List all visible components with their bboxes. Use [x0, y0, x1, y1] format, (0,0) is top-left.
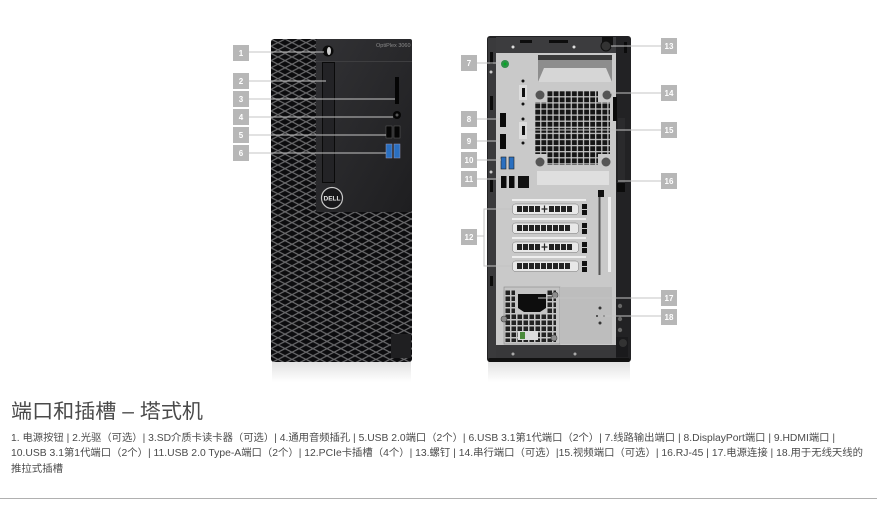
label 15: 15	[665, 126, 674, 135]
label 5: 5	[239, 131, 244, 140]
description text: 推拉式插槽	[11, 462, 63, 475]
optical drive bay	[322, 62, 334, 182]
label 5	[233, 127, 249, 143]
RJ-45 port	[518, 176, 529, 188]
label 2: 2	[239, 77, 244, 86]
top trapezoid vent	[538, 55, 612, 82]
PCIe side rail	[598, 197, 611, 275]
label 8	[461, 111, 477, 127]
label 16	[661, 173, 677, 189]
label 9: 9	[467, 137, 472, 146]
description text: 1. 电源按钮 | 2.光驱（可选）| 3.SD介质卡读卡器（可选）| 4.通用音频插孔 | 5.USB 2.0端口（2个）| 6.USB 3.1第1代端口（2个）| 7.线路输出端口 | 8.DisplayPort端口 | 9.HDMI端口 |	[11, 431, 835, 444]
USB 3.1 rear ports	[501, 157, 514, 169]
label 4	[233, 109, 249, 125]
reflection under front tower	[272, 362, 411, 382]
label 7	[461, 55, 477, 71]
label 11	[461, 171, 477, 187]
PCIe slot 4	[512, 256, 587, 272]
power switch	[518, 331, 538, 340]
PCIe slot 3	[512, 237, 587, 253]
label 1: 1	[239, 49, 244, 58]
USB 3.1 front ports	[386, 144, 400, 158]
USB 2.0 front ports	[386, 126, 400, 138]
label 7: 7	[467, 59, 472, 68]
label 9	[461, 133, 477, 149]
bottom divider	[0, 498, 877, 499]
thumbscrew	[601, 37, 613, 51]
left edge grey strip	[488, 38, 496, 360]
lower right foot	[616, 337, 628, 357]
panel: rear view of tower	[487, 36, 631, 382]
description text	[11, 431, 863, 475]
rear tower body	[487, 36, 631, 362]
silver rear plate	[496, 53, 616, 345]
label 3	[233, 91, 249, 107]
AC power socket	[515, 288, 547, 314]
label 10: 10	[465, 156, 474, 165]
HDMI port	[500, 134, 506, 149]
label 16: 16	[665, 177, 674, 186]
label 8: 8	[467, 115, 472, 124]
PCIe slot 2	[512, 218, 587, 234]
antenna blank	[537, 171, 609, 185]
front tower body with mesh	[271, 39, 412, 362]
USB 2.0 rear ports	[501, 176, 514, 188]
power supply screws	[501, 292, 558, 341]
reflection under rear tower	[488, 362, 630, 382]
front bottom foot block	[391, 334, 411, 358]
label 10	[461, 152, 477, 168]
audio jack	[393, 111, 401, 119]
top band details	[512, 40, 576, 48]
label 14	[661, 85, 677, 101]
label 15	[661, 122, 677, 138]
fan grille	[535, 91, 610, 165]
callout leader lines	[249, 46, 661, 316]
label 1	[233, 45, 249, 61]
antenna openings	[596, 306, 605, 324]
fan screws	[536, 90, 612, 166]
panel: front view of tower	[271, 39, 412, 382]
video port knockout	[519, 118, 527, 144]
PCIe slot 1	[512, 199, 587, 215]
DisplayPort	[500, 113, 506, 127]
label 6	[233, 145, 249, 161]
front upper fascia	[316, 39, 412, 212]
SD card reader	[395, 77, 399, 104]
fan grille corners	[535, 91, 610, 165]
bottom edge	[488, 358, 630, 362]
Dell logo	[322, 188, 342, 208]
title: 端口和插槽 – 塔式机	[11, 400, 203, 423]
wireless antenna plate	[560, 287, 612, 344]
label 13: 13	[665, 42, 674, 51]
serial port knockout	[519, 80, 527, 106]
model name: OptiPlex 3060	[376, 43, 411, 49]
label 17	[661, 290, 677, 306]
label 18	[661, 309, 677, 325]
label 11: 11	[465, 175, 474, 184]
Dell logo: DELL	[324, 196, 341, 202]
power supply plate	[504, 287, 560, 344]
bottom band	[496, 345, 616, 362]
label 4: 4	[239, 113, 244, 122]
callout numbers	[233, 38, 677, 325]
description text: 10.USB 3.1第1代端口（2个）| 11.USB 2.0 Type-A端口（2个）| 12.PCIe卡插槽（4个）| 13.螺钉 | 14.串行端口（可选）|15.视频端口（可选）| 16.RJ-45 | 17.电源连接 | 18.用于无线天线的	[11, 446, 863, 459]
label 12	[461, 229, 477, 245]
label 12: 12	[465, 233, 474, 242]
label 18: 18	[665, 313, 674, 322]
line-out jack	[501, 60, 509, 68]
label 6: 6	[239, 149, 244, 158]
power supply vents	[505, 290, 556, 342]
label 3: 3	[239, 95, 244, 104]
top dark band	[496, 37, 616, 53]
label 2	[233, 73, 249, 89]
label 14: 14	[665, 89, 674, 98]
left side slots	[490, 52, 493, 286]
fascia top seam	[316, 61, 412, 62]
label 13	[661, 38, 677, 54]
icon: power button	[322, 46, 334, 56]
label 17: 17	[665, 294, 674, 303]
right side latch and channel	[613, 42, 627, 192]
antenna connectors	[618, 304, 622, 332]
small screw detail	[598, 190, 604, 197]
